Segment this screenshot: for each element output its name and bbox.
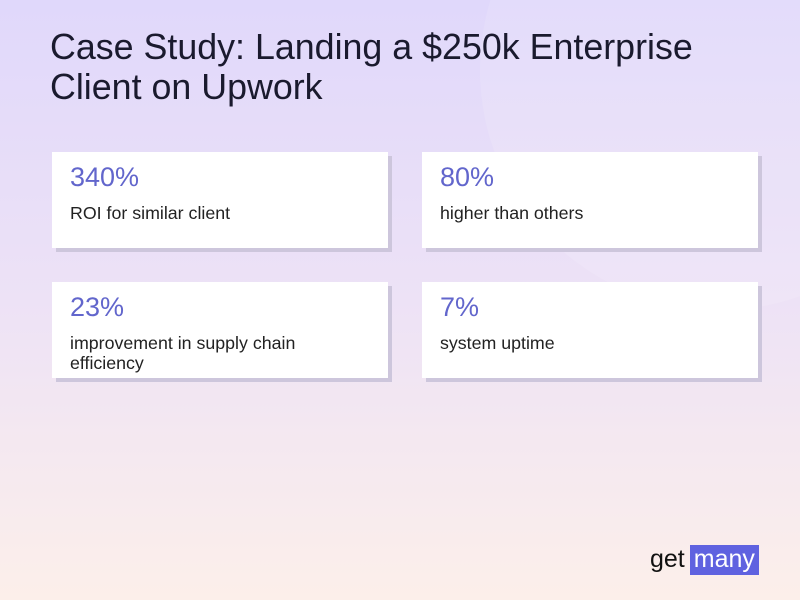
- card: 80%: higher than others: [440, 203, 583, 223]
- card: 23%: [52, 282, 388, 378]
- card: 340%: [52, 152, 388, 248]
- card: 340%: ROI for similar client: [70, 203, 230, 223]
- card: 23%: improvement in supply chain efficiency: [70, 333, 295, 373]
- card: 23%: 23%: [70, 292, 124, 322]
- card: 80%: [422, 152, 758, 248]
- card: 7%: system uptime: [440, 333, 555, 353]
- card: 7%: [422, 282, 758, 378]
- card: 80%: 80%: [440, 162, 494, 192]
- title: Case Study: Landing a $250k Enterprise Client on Upwork: [50, 27, 693, 107]
- card: 340%: 340%: [70, 162, 139, 192]
- card: 7%: 7%: [440, 292, 479, 322]
- logo: get many: [650, 545, 755, 573]
